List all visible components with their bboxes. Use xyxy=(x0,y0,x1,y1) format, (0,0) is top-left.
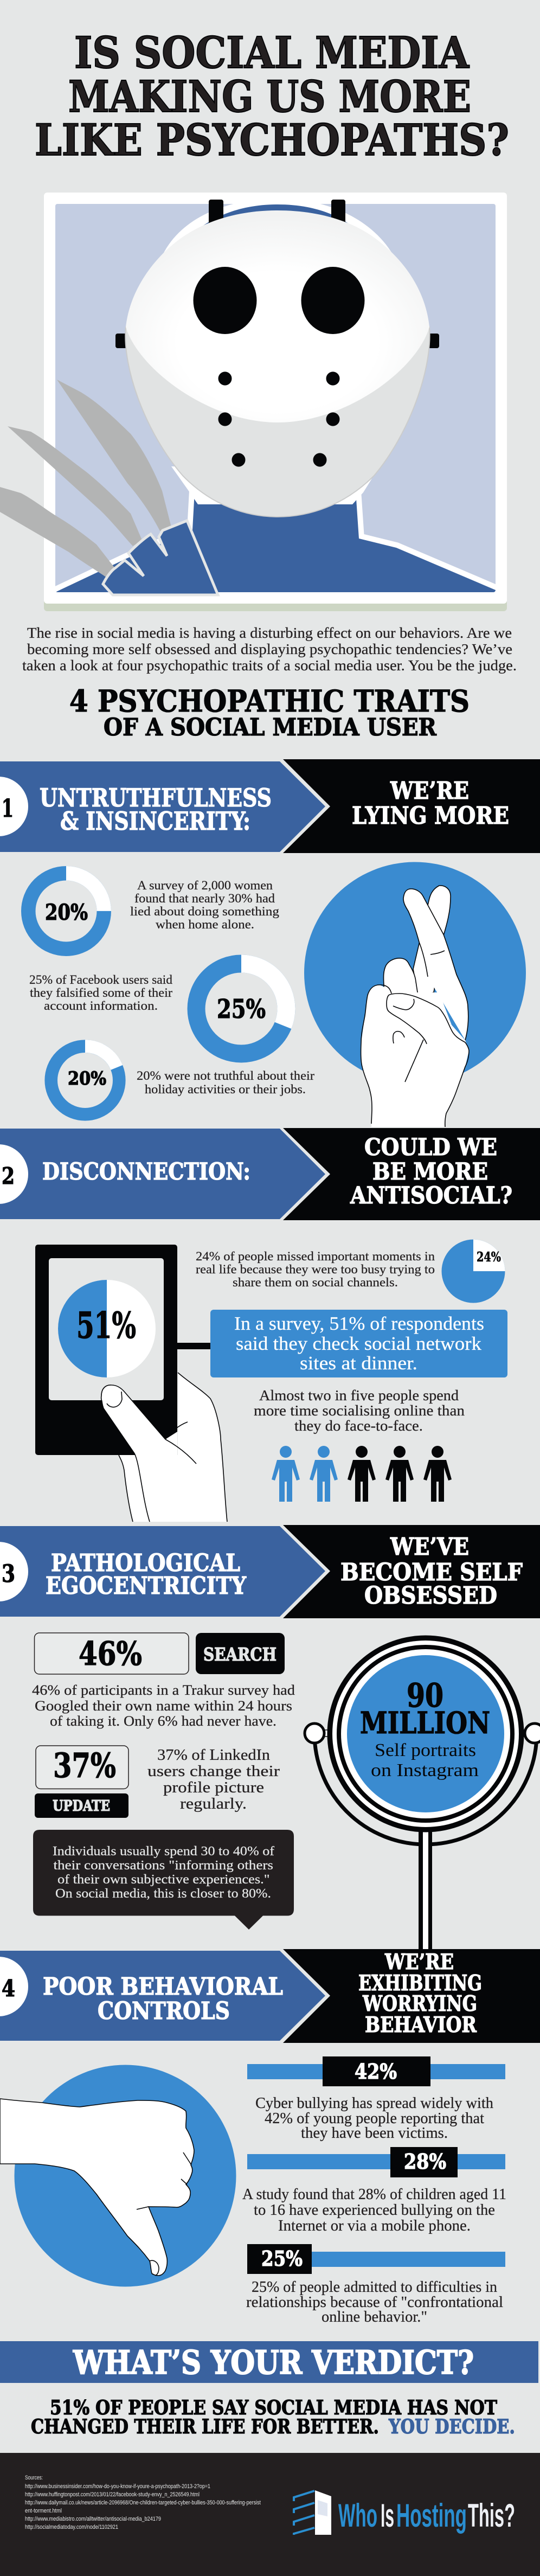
chart: 24 percent pie: 24% xyxy=(477,1249,501,1265)
text: survey of women: lied about doing something xyxy=(130,905,280,918)
phone body xyxy=(35,1245,177,1455)
search box 46 percent: 46% xyxy=(79,1635,142,1673)
chart: 24 percent pie xyxy=(441,1240,505,1303)
closing statement: CHANGED THEIR LIFE FOR BETTER. xyxy=(31,2415,379,2438)
number: 1 xyxy=(2,794,14,823)
search button xyxy=(196,1633,285,1674)
intro text: The rise in social media is having a disturbing effect on our behaviors. Are we xyxy=(27,625,512,641)
text: survey of women: A survey of 2,000 women xyxy=(137,879,273,892)
icon: thumbs down on blue circle xyxy=(0,2065,236,2286)
logo wordmark: Is xyxy=(381,2497,394,2534)
icon: mirror with stand xyxy=(305,1636,540,1950)
text: facebook users xyxy=(29,973,173,1013)
mask forehead xyxy=(126,210,429,422)
search box 46 percent xyxy=(35,1633,189,1674)
phone screen xyxy=(49,1258,164,1400)
chart: donut 25 percent xyxy=(196,964,286,1054)
mirror label: Self portraits xyxy=(375,1740,476,1760)
number: 2 xyxy=(2,1163,15,1189)
callout: dinner: said they check social network xyxy=(236,1333,482,1354)
text: linkedin xyxy=(147,1747,280,1812)
tagline: WE’RE xyxy=(390,777,469,805)
text: survey of women xyxy=(130,879,280,931)
title: IS SOCIAL MEDIA xyxy=(74,27,470,78)
panel: hero illustration xyxy=(0,193,507,611)
intro text: taken a look at four psychopathic traits of a social media user. You be the judge. xyxy=(22,657,517,674)
chart: 51 percent pie: 51% xyxy=(76,1304,136,1347)
icon: hand holding phone xyxy=(35,1245,227,1522)
sources list xyxy=(25,2475,261,2530)
mirror label xyxy=(360,1677,490,1780)
sources list: Sources: xyxy=(25,2475,43,2481)
logo wordmark xyxy=(338,2497,515,2534)
white frame xyxy=(44,193,507,604)
text: trakur survey: of taking it. Only 6% had never have. xyxy=(50,1713,277,1729)
text: holiday activities xyxy=(137,1069,314,1096)
mirror rings xyxy=(327,1636,524,1832)
text: facebook users: 25% of Facebook users said xyxy=(29,973,173,986)
trait name: POOR BEHAVIORAL xyxy=(43,1973,283,2001)
trait name: & INSINCERITY: xyxy=(60,806,250,836)
stat bar: 25 percent: 25% xyxy=(261,2246,303,2271)
logo: who is hosting this xyxy=(294,2490,515,2535)
title xyxy=(35,27,509,165)
trait name: PATHOLOGICAL xyxy=(51,1549,240,1577)
banner 3: pathological egocentricity xyxy=(0,1525,540,1618)
chart: donut 25 percent: 25% xyxy=(217,994,266,1024)
text: two in five xyxy=(254,1387,465,1434)
blue arrow panel xyxy=(0,1129,325,1219)
thumb xyxy=(387,994,465,1044)
callout connector xyxy=(177,1343,210,1349)
text: trakur survey xyxy=(32,1682,295,1729)
sources list: http://www.huffingtonpost.com/2013/01/22/facebook-study-envy_n_2526549.html xyxy=(25,2491,200,2498)
mask straps xyxy=(115,200,439,348)
text: linkedin: regularly. xyxy=(180,1796,247,1812)
logo rungs xyxy=(294,2491,314,2535)
mask eyes xyxy=(193,267,364,334)
tagline: BECOME SELF xyxy=(340,1559,523,1586)
sources list: http://www.dailymail.co.uk/news/article-2096968/One-children-targeted-cyber-bullies-350-000-suffering-persist xyxy=(25,2500,261,2506)
frame shadow xyxy=(44,193,507,611)
closing statement: YOU DECIDE. xyxy=(388,2415,515,2438)
black arrow panel xyxy=(283,1949,540,2043)
thumb outline and creases xyxy=(101,1385,196,1522)
speech bubble: of their own subjective experiences." xyxy=(57,1873,270,1887)
text: cyber bullying: they have been victims. xyxy=(301,2124,448,2142)
tagline: COULD WE xyxy=(364,1134,497,1161)
text: facebook users: they falsified some of their xyxy=(30,986,172,999)
chart: donut 20 percent B xyxy=(51,1046,119,1114)
blue circle xyxy=(14,2065,236,2286)
hand back xyxy=(119,1373,227,1522)
text: linkedin: users change their xyxy=(147,1763,280,1780)
text: holiday activities: 20% were not truthful about their xyxy=(137,1069,314,1082)
search button: SEARCH xyxy=(203,1644,277,1665)
text: missed moments: share them on social channels. xyxy=(233,1276,398,1289)
text: missed moments xyxy=(196,1249,435,1289)
claw hand xyxy=(103,521,218,595)
number: 3 xyxy=(2,1560,15,1588)
mirror label: 90 xyxy=(407,1677,443,1715)
logo wordmark: Who xyxy=(338,2497,377,2534)
text: survey of women: found that nearly 30% had xyxy=(134,892,275,905)
palm fill xyxy=(361,985,469,1127)
text: cyber bullying: 42% of young people reporting that xyxy=(265,2110,484,2127)
tagline: WORRYING xyxy=(362,1991,477,2016)
text: linkedin: 37% of LinkedIn xyxy=(157,1747,270,1764)
stat bar: 42 percent xyxy=(247,2056,505,2086)
tagline: WE’VE xyxy=(390,1533,469,1561)
footer panel xyxy=(0,2453,540,2576)
stat bar: 28 percent xyxy=(247,2147,505,2177)
sky panel xyxy=(55,204,496,592)
chart: donut 20 percent A xyxy=(28,873,104,949)
tagline xyxy=(340,1533,523,1610)
stat bar: 28 percent: 28% xyxy=(404,2149,446,2174)
folded finger xyxy=(383,958,418,1009)
heading: 4 psychopathic traits xyxy=(69,683,470,741)
head top xyxy=(187,204,361,260)
mask holes xyxy=(218,371,339,467)
blue arrow panel xyxy=(0,1526,325,1617)
tagline: WE’RE xyxy=(384,1950,454,1975)
text: study of children xyxy=(242,2186,506,2234)
callout: dinner: sites at dinner. xyxy=(300,1353,417,1374)
chart: donut 20 percent A: 20% xyxy=(45,900,88,925)
intro text xyxy=(22,625,517,674)
tagline: BE MORE xyxy=(372,1158,488,1186)
tagline: ANTISOCIAL? xyxy=(350,1182,512,1209)
text: two in five: they do face-to-face. xyxy=(294,1418,423,1434)
tagline: OBSESSED xyxy=(364,1582,497,1610)
black arrow panel xyxy=(283,759,540,853)
body and shoulders xyxy=(56,491,496,594)
speech bubble: Individuals usually spend 30 to 40% of xyxy=(53,1844,274,1859)
callout: dinner xyxy=(210,1310,507,1377)
text: study of children: A study found that 28% of children aged 11 xyxy=(242,2186,506,2203)
callout: dinner: In a survey, 51% of respondents xyxy=(234,1313,484,1334)
stat bar: 42 percent: 42% xyxy=(355,2059,397,2084)
number: 4 xyxy=(2,1975,15,2002)
banner 1: untruthfulness xyxy=(0,759,540,853)
sources list: ent-torment.html xyxy=(25,2508,62,2514)
tagline: LYING MORE xyxy=(352,802,509,830)
logo wordmark: Hosting xyxy=(396,2497,467,2534)
hand xyxy=(0,2099,194,2276)
chart: 51 percent pie xyxy=(58,1280,156,1377)
text: study of children: Internet or via a mobile phone. xyxy=(278,2217,471,2234)
thumb nail and creases xyxy=(393,951,445,1082)
update box 37 percent: 37% xyxy=(53,1746,116,1785)
text: two in five: Almost two in five people spend xyxy=(259,1387,459,1404)
text: survey of women: when home alone. xyxy=(156,918,254,931)
trait name xyxy=(40,783,272,836)
thumb xyxy=(101,1385,177,1464)
number badge xyxy=(0,1542,28,1601)
number badge xyxy=(0,1957,28,2016)
text: holiday activities: holiday activities or their jobs. xyxy=(145,1082,306,1096)
tagline xyxy=(358,1950,482,2037)
mask chin xyxy=(125,327,430,517)
banner 4: poor behavioral controls xyxy=(0,1949,540,2043)
stand post xyxy=(419,1831,432,1950)
palm outline xyxy=(361,985,469,1127)
banner: what's your verdict: WHAT’S YOUR VERDICT? xyxy=(73,2344,474,2382)
speech bubble xyxy=(33,1830,294,1930)
speech bubble: their conversations "informing others xyxy=(53,1859,273,1873)
claw blades xyxy=(0,380,171,579)
heading: 4 psychopathic traits: 4 PSYCHOPATHIC TRAITS xyxy=(69,683,470,719)
text: linkedin: profile picture xyxy=(163,1779,264,1796)
neck outline xyxy=(171,466,377,504)
blue arrow panel xyxy=(0,1951,325,2041)
text: two in five: more time socialising online than xyxy=(254,1402,465,1419)
black arrow panel xyxy=(283,1128,540,1220)
number badge xyxy=(0,777,28,836)
text: relationships xyxy=(246,2278,503,2325)
heading: 4 psychopathic traits: OF A SOCIAL MEDIA USER xyxy=(104,714,436,741)
text: cyber bullying xyxy=(255,2094,493,2142)
tagline: BEHAVIOR xyxy=(365,2013,477,2037)
black arrow panel xyxy=(283,1525,540,1618)
number badge xyxy=(0,1144,28,1204)
stand arc xyxy=(314,1733,537,1844)
icon: five people xyxy=(272,1446,452,1502)
title: MAKING US MORE xyxy=(68,71,471,122)
pivots xyxy=(323,1730,330,1736)
sources list: http://socialmediatoday.com/node/1102921 xyxy=(25,2524,118,2530)
mirror glass xyxy=(347,1655,504,1812)
text: relationships: 25% of people admitted to difficulties in xyxy=(252,2278,497,2296)
trait name: UNTRUTHFULNESS xyxy=(40,783,272,812)
text: facebook users: account information. xyxy=(44,999,158,1013)
text: relationships: relationships because of "confrontational xyxy=(246,2293,503,2311)
mirror label: on Instagram xyxy=(371,1760,479,1780)
trait name xyxy=(43,1973,283,2025)
text: missed moments: 24% of people missed important moments in xyxy=(196,1249,435,1263)
creases and nail xyxy=(137,2152,191,2276)
text: trakur survey: Googled their own name within 24 hours xyxy=(35,1698,292,1714)
trait name: CONTROLS xyxy=(98,1997,230,2025)
tagline: EXHIBITING xyxy=(358,1971,482,1996)
stat bar: 25 percent xyxy=(247,2244,505,2274)
text: study of children: to 16 have experienced bullying on the xyxy=(254,2201,495,2219)
tagline xyxy=(352,777,509,830)
blue arrow panel xyxy=(0,761,325,852)
trait name: EGOCENTRICITY xyxy=(46,1572,246,1600)
text: missed moments: real life because they were too busy trying to xyxy=(196,1263,435,1276)
closing statement xyxy=(31,2396,515,2438)
mirror label: MILLION xyxy=(360,1705,490,1740)
banner 2: disconnection xyxy=(0,1128,540,1220)
logo building xyxy=(315,2490,331,2535)
intro text: becoming more self obsessed and displaying psychopathic tendencies? We’ve xyxy=(27,641,512,657)
blue circle xyxy=(304,862,526,1084)
head outline xyxy=(163,198,393,282)
trait name: DISCONNECTION: xyxy=(42,1158,250,1186)
update button xyxy=(35,1793,128,1818)
text: cyber bullying: Cyber bullying has spread widely with xyxy=(255,2094,493,2112)
text: trakur survey: 46% of participants in a Trakur survey had xyxy=(32,1682,295,1698)
chart: donut 20 percent B: 20% xyxy=(68,1068,106,1090)
update button: UPDATE xyxy=(53,1798,110,1815)
icon: crossed fingers on blue circle xyxy=(304,862,526,1127)
tagline xyxy=(350,1134,512,1209)
trait name xyxy=(46,1549,246,1600)
sources list: http://www.businessinsider.com/how-do-you-know-if-youre-a-psychopath-2013-2?op=1 xyxy=(25,2483,210,2490)
speech bubble: On social media, this is closer to 80%. xyxy=(55,1887,271,1901)
front finger xyxy=(403,889,468,1040)
text: relationships: online behavior." xyxy=(322,2308,427,2325)
sources list: http://www.mediabistro.com/alltwitter/antisocial-media_b24179 xyxy=(25,2516,161,2522)
hand outline xyxy=(119,1373,227,1522)
back finger xyxy=(413,886,451,996)
